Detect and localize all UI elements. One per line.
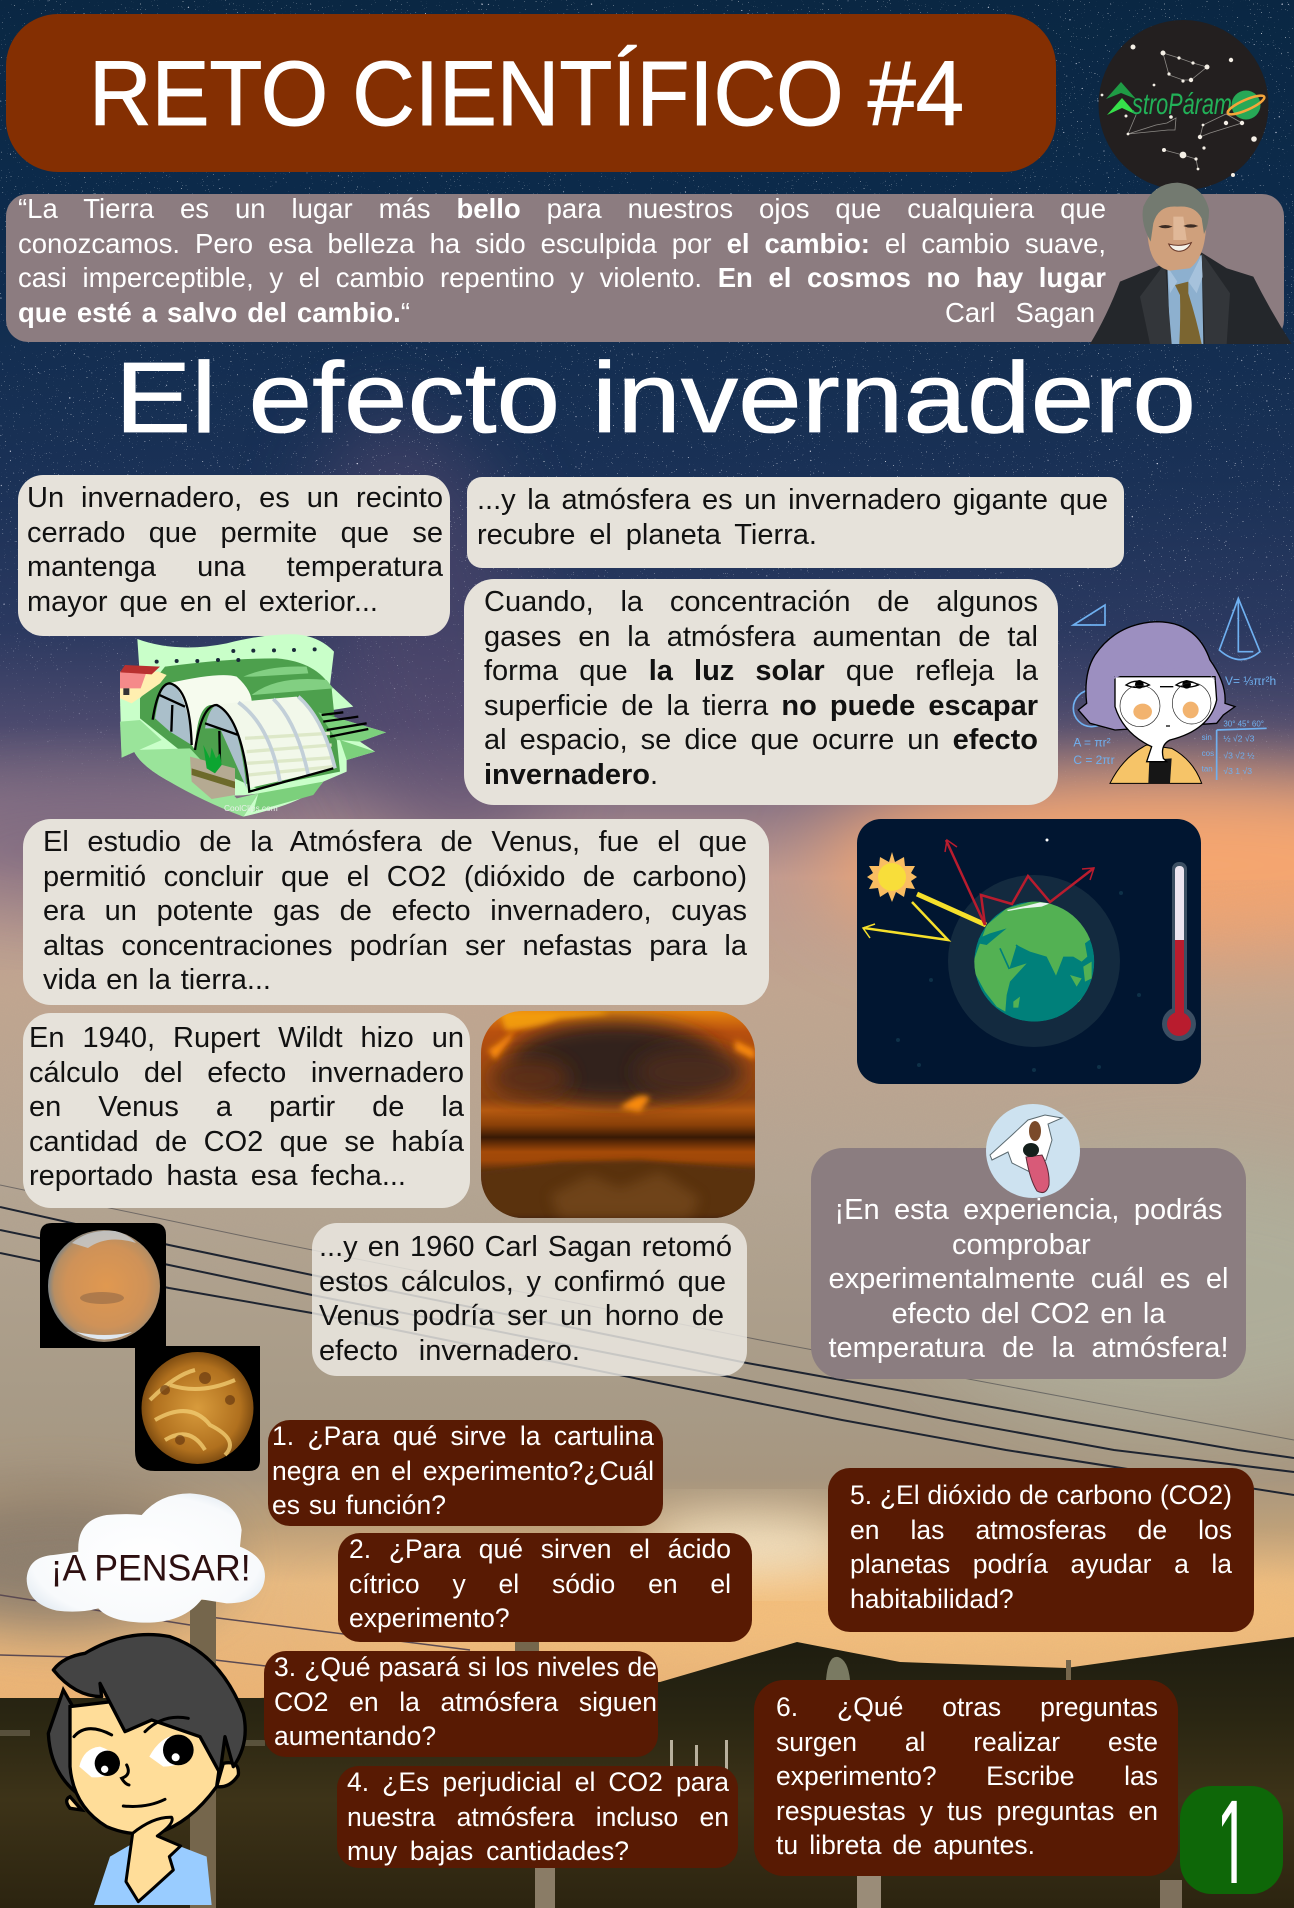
cloud speech bubble: A pensar (27, 1493, 265, 1623)
text (29, 1022, 464, 1192)
heading: el efecto invernadero: El efecto invernadero (115, 342, 1196, 454)
text (477, 484, 1108, 551)
text: experimento? (349, 1603, 510, 1633)
text: permitió concluir que el CO2 (dióxido de carbono) (43, 861, 747, 893)
text: 2. ¿Para qué sirven el ácido (349, 1534, 731, 1564)
text: respuestas y tus preguntas en (776, 1796, 1158, 1826)
text: El estudio de la Atmósfera de Venus, fue el que (43, 826, 747, 858)
cloud speech bubble: A pensar: ¡A PENSAR! (51, 1547, 251, 1589)
icon: dog avatar (986, 1104, 1080, 1198)
text (484, 586, 1038, 791)
text: gases en la atmósfera aumentan de tal (484, 621, 1038, 653)
text: vida en la tierra... (43, 964, 271, 996)
eyes (79, 1747, 120, 1777)
text (274, 1652, 657, 1751)
title: reto científico: RETO CIENTÍFICO #4 (89, 43, 964, 145)
text: 3. ¿Qué pasará si los niveles de (274, 1652, 657, 1682)
text (319, 1231, 732, 1367)
illustration: greenhouse clip art (120, 634, 386, 817)
text: En 1940, Rupert Wildt hizo un (29, 1022, 464, 1054)
text: planetas podría ayudar a la (850, 1549, 1232, 1579)
text (347, 1767, 729, 1866)
illustration: girl with math formulas: sin (1202, 733, 1212, 742)
text: 1. ¿Para qué sirve la cartulina (272, 1421, 654, 1451)
text: al espacio, se dice que ocurre un efecto (484, 724, 1038, 756)
brows, nose and mouth (74, 1717, 188, 1806)
illustration: girl with math formulas: tan (1202, 765, 1213, 774)
logo: AstroPáram: stroPáram (1132, 88, 1232, 121)
illustration: girl with math formulas (1073, 598, 1276, 783)
panel: greenhouse effect explanation (464, 579, 1058, 805)
illustration: girl with math formulas: cos (1202, 749, 1214, 758)
illustration: girl with math formulas: ½ √2 √3 (1223, 734, 1255, 744)
text: experimento? Escribe las (776, 1761, 1158, 1791)
text: aumentando? (274, 1721, 436, 1751)
illustration: girl with math formulas: V= ⅓πr²h (1225, 674, 1276, 688)
text: comprobar (952, 1229, 1091, 1261)
text: efecto invernadero. (319, 1335, 580, 1367)
quote attribution: Carl Sagan (945, 297, 1095, 328)
quote panel: Carl Sagan (6, 194, 1284, 342)
header banner (6, 14, 1056, 172)
question 3 (264, 1651, 658, 1757)
face (70, 1697, 223, 1834)
panel: experiment call-out (811, 1148, 1246, 1379)
text: mantenga una temperatura (27, 551, 443, 583)
text: en las atmosferas de los (850, 1515, 1232, 1545)
panel: atmosphere as giant greenhouse (467, 477, 1124, 568)
illustration: girl with math formulas: 30° 45° 60° (1223, 720, 1264, 729)
question 4 (337, 1766, 738, 1868)
text: habitabilidad? (850, 1584, 1014, 1614)
text: tu libreta de apuntes. (776, 1830, 1035, 1860)
text: invernadero. (484, 759, 658, 791)
shirt (94, 1845, 212, 1905)
text: muy bajas cantidades? (347, 1836, 629, 1866)
text: efecto del CO2 en la (892, 1298, 1166, 1330)
text: cerrado que permite que se (27, 517, 443, 549)
text: ...y la atmósfera es un invernadero gigante que (477, 484, 1108, 516)
sun (867, 852, 917, 902)
planet Earth (973, 900, 1094, 1022)
text: cítrico y el sódio en el (349, 1569, 731, 1599)
text: negra en el experimento?¿Cuál (272, 1456, 654, 1486)
text: altas concentraciones podrían ser nefastas para la (43, 930, 747, 962)
text: Cuando, la concentración de algunos (484, 586, 1038, 618)
text: nuestra atmósfera incluso en (347, 1802, 729, 1832)
image: planet Venus (135, 1346, 260, 1471)
illustration: girl with math formulas: C = 2πr (1073, 753, 1115, 767)
text: forma que la luz solar que refleja la (484, 655, 1038, 687)
text: superficie de la tierra no puede escapar (484, 690, 1038, 722)
quote text: “La Tierra es un lugar más bello para nuestros ojos que cualquiera que (18, 193, 1106, 224)
question 5 (828, 1468, 1254, 1632)
text: CO2 en la atmósfera siguen (274, 1687, 657, 1717)
logo: AstroPáram (1098, 20, 1268, 190)
question 1 (268, 1420, 663, 1526)
illustration: girl with math formulas: √3 1 √3 (1223, 766, 1252, 776)
portrait: Carl Sagan (1090, 183, 1292, 344)
text: ¡En esta experiencia, podrás (834, 1194, 1222, 1226)
illustration: Earth greenhouse diagram (857, 819, 1201, 1084)
illustration: greenhouse clip art: CoolClips.com (224, 803, 278, 813)
character: thinking boy (48, 1635, 245, 1905)
panel: Carl Sagan 1960 (312, 1223, 747, 1376)
text (27, 482, 443, 618)
text: 4. ¿Es perjudicial el CO2 para (347, 1767, 729, 1797)
text: surgen al realizar este (776, 1727, 1158, 1757)
text: experimentalmente cuál es el (828, 1263, 1228, 1295)
panel: Rupert Wildt 1940 (23, 1013, 470, 1208)
question 2 (338, 1533, 752, 1642)
text (349, 1534, 731, 1633)
quote text: casi imperceptible, y el cambio repentino y violento. En el cosmos no hay lugar (18, 262, 1106, 293)
question 6 (754, 1680, 1178, 1876)
text: era un potente gas de efecto invernadero, cuyas (43, 895, 747, 927)
quote text (18, 193, 1106, 328)
illustration: girl with math formulas: √3 √2 ½ (1223, 750, 1254, 760)
text: es su función? (272, 1490, 446, 1520)
text: cálculo del efecto invernadero (29, 1057, 464, 1089)
quote text: conozcamos. Pero esa belleza ha sido esculpida por el cambio: el cambio suave, (18, 228, 1106, 259)
panel: study of Venus atmosphere (23, 819, 769, 1005)
text (272, 1421, 654, 1520)
image: surface of Venus (481, 1011, 755, 1218)
text: mayor que en el exterior... (27, 586, 378, 618)
text: recubre el planeta Tierra. (477, 519, 817, 551)
text (850, 1480, 1232, 1614)
hand (126, 1817, 181, 1902)
text (43, 826, 747, 996)
text: cantidad de CO2 que se había (29, 1126, 464, 1158)
image: planet Mars (40, 1223, 166, 1348)
text: reportado hasta esa fecha... (29, 1160, 406, 1192)
text (828, 1194, 1228, 1364)
text: en Venus a partir de la (29, 1091, 464, 1123)
page number tile (1180, 1786, 1283, 1894)
arrows: reflected sunlight (863, 840, 1094, 940)
hair (53, 1635, 245, 1773)
thermometer (1162, 862, 1196, 1041)
text: Un invernadero, es un recinto (27, 482, 443, 514)
text: Venus podría ser un horno de (319, 1300, 724, 1332)
panel: greenhouse definition (18, 475, 450, 636)
text: ...y en 1960 Carl Sagan retomó (319, 1231, 732, 1263)
text: 6. ¿Qué otras preguntas (776, 1692, 1158, 1722)
text: 5. ¿El dióxido de carbono (CO2) (850, 1480, 1232, 1510)
text (776, 1692, 1158, 1860)
text: estos cálculos, y confirmó que (319, 1266, 726, 1298)
atmosphere halo (948, 875, 1120, 1047)
illustration: girl with math formulas: A = πr² (1073, 736, 1111, 750)
text: temperatura de la atmósfera! (828, 1332, 1228, 1364)
quote text: que esté a salvo del cambio.“ (18, 297, 410, 328)
